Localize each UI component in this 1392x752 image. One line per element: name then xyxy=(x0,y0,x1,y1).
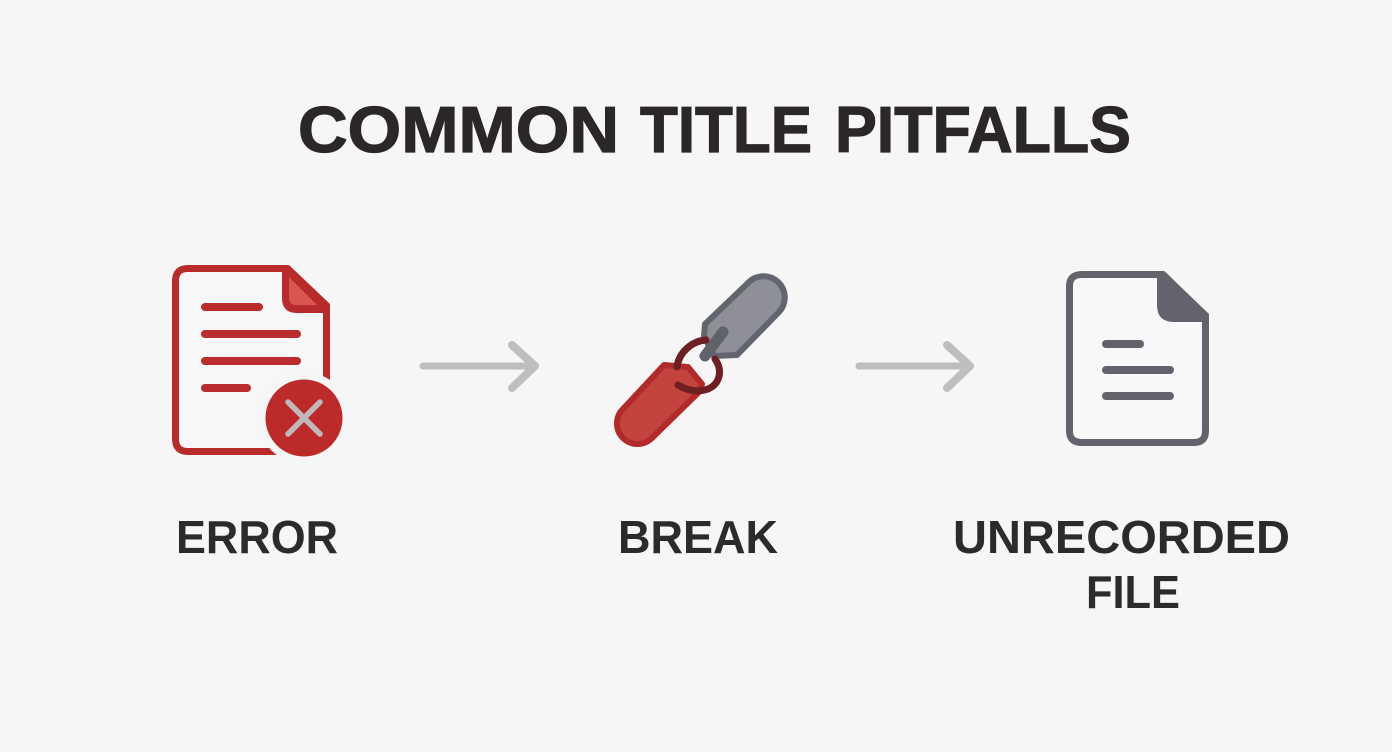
label: unrecorded file: FILE xyxy=(1086,566,1180,618)
gray tab xyxy=(705,332,723,356)
label: error: ERROR xyxy=(176,511,338,563)
icon: unrecorded file xyxy=(1070,271,1209,442)
arrow: error to break xyxy=(423,345,535,388)
connecting ring xyxy=(677,340,719,391)
title: COMMON xyxy=(298,93,619,166)
title: TITLE xyxy=(640,93,812,166)
gray link xyxy=(704,276,785,356)
label: unrecorded file xyxy=(953,511,1290,618)
red link xyxy=(617,365,702,444)
label: unrecorded file: UNRECORDED xyxy=(953,511,1290,563)
arrow: break to unrecorded file xyxy=(859,345,970,388)
icon: error document xyxy=(176,265,350,464)
title xyxy=(298,93,1131,166)
icon: broken chain link xyxy=(617,276,785,444)
title: PITFALLS xyxy=(835,93,1131,166)
label: break: BREAK xyxy=(618,511,778,563)
